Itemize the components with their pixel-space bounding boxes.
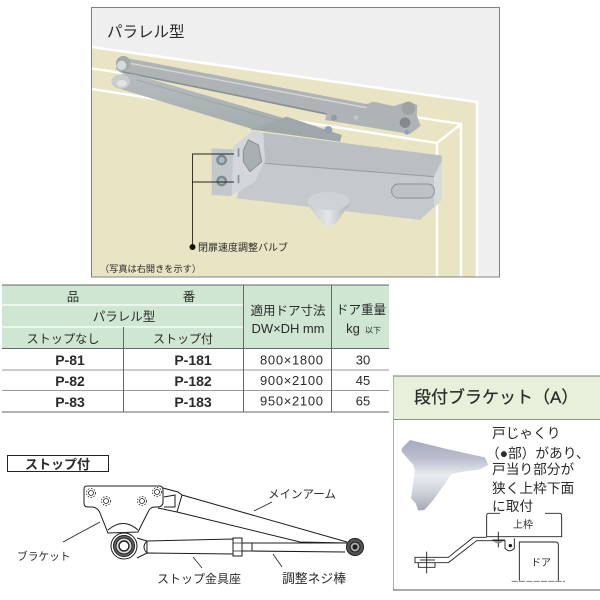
door closer body [212, 130, 442, 227]
spec table [2, 285, 389, 412]
table rows: P-182 [174, 373, 212, 389]
table rows: 900×2100 [260, 373, 323, 388]
label: upper frame: 上枠 [513, 518, 533, 531]
table header: 品 [67, 290, 79, 304]
table rows: 45 [356, 373, 370, 388]
bracket description: （●部）があり、 [486, 446, 590, 461]
table rows: P-181 [174, 352, 212, 368]
bracket description [486, 426, 590, 514]
diagram: arm assembly with stop [84, 486, 364, 559]
table header: ストップ付 [153, 332, 213, 346]
arm end [346, 538, 364, 556]
label: closing speed adjustment valve: 閉扉速度調整バルブ [198, 241, 288, 254]
panel: parallel type product photo [92, 8, 500, 277]
table rows: 800×1800 [260, 352, 323, 368]
diagram labels: ストップ金具座 [157, 572, 241, 586]
table header [26, 290, 386, 346]
table header: ドア重量 [336, 302, 386, 317]
table rows [55, 352, 370, 410]
table header: kg [346, 321, 360, 336]
bracket description: 戸じゃくり [492, 426, 560, 441]
note: right-hand opening: （写真は右開きを示す） [100, 263, 201, 274]
label box: with stop [8, 456, 108, 472]
table rows: P-81 [55, 352, 85, 368]
table rows: P-183 [174, 394, 212, 410]
panel: stepped bracket A [393, 376, 600, 590]
table header: DW×DH mm [252, 321, 324, 336]
pivot [111, 533, 137, 559]
label: door: ドア [531, 558, 551, 569]
door closer arms [111, 56, 421, 142]
stop base and adjusting rod [137, 538, 233, 558]
table rows: P-82 [55, 373, 85, 389]
diagram labels [17, 488, 346, 586]
bracket description: 狭く上枠下面 [492, 481, 574, 496]
table rows: P-83 [55, 394, 85, 410]
table header: パラレル型 [93, 310, 155, 324]
table rows: 65 [356, 394, 370, 408]
heading: parallel type: パラレル型 [107, 23, 185, 41]
main arm [158, 488, 347, 543]
diagram labels: 調整ネジ棒 [282, 571, 346, 586]
leader lines [63, 502, 282, 568]
diagram labels: メインアーム [268, 488, 336, 501]
table header: 番 [183, 290, 196, 304]
bracket plate [84, 486, 163, 533]
bracket description: 戸当り部分が [492, 462, 574, 477]
heading: stepped bracket: 段付ブラケット（A） [414, 387, 578, 407]
bracket description: に取付 [492, 499, 533, 514]
table rows: 30 [356, 352, 370, 368]
table header: 適用ドア寸法 [250, 304, 326, 318]
leader lines to speed valve [190, 154, 234, 250]
diagram labels: ブラケット [17, 550, 70, 563]
label box: with stop: ストップ付 [25, 457, 90, 472]
table rows: 950×2100 [260, 394, 323, 408]
bracket photo [402, 440, 488, 511]
bracket mounting diagram [415, 513, 565, 581]
table header: 以下 [365, 326, 381, 335]
table header: ストップなし [26, 332, 100, 346]
